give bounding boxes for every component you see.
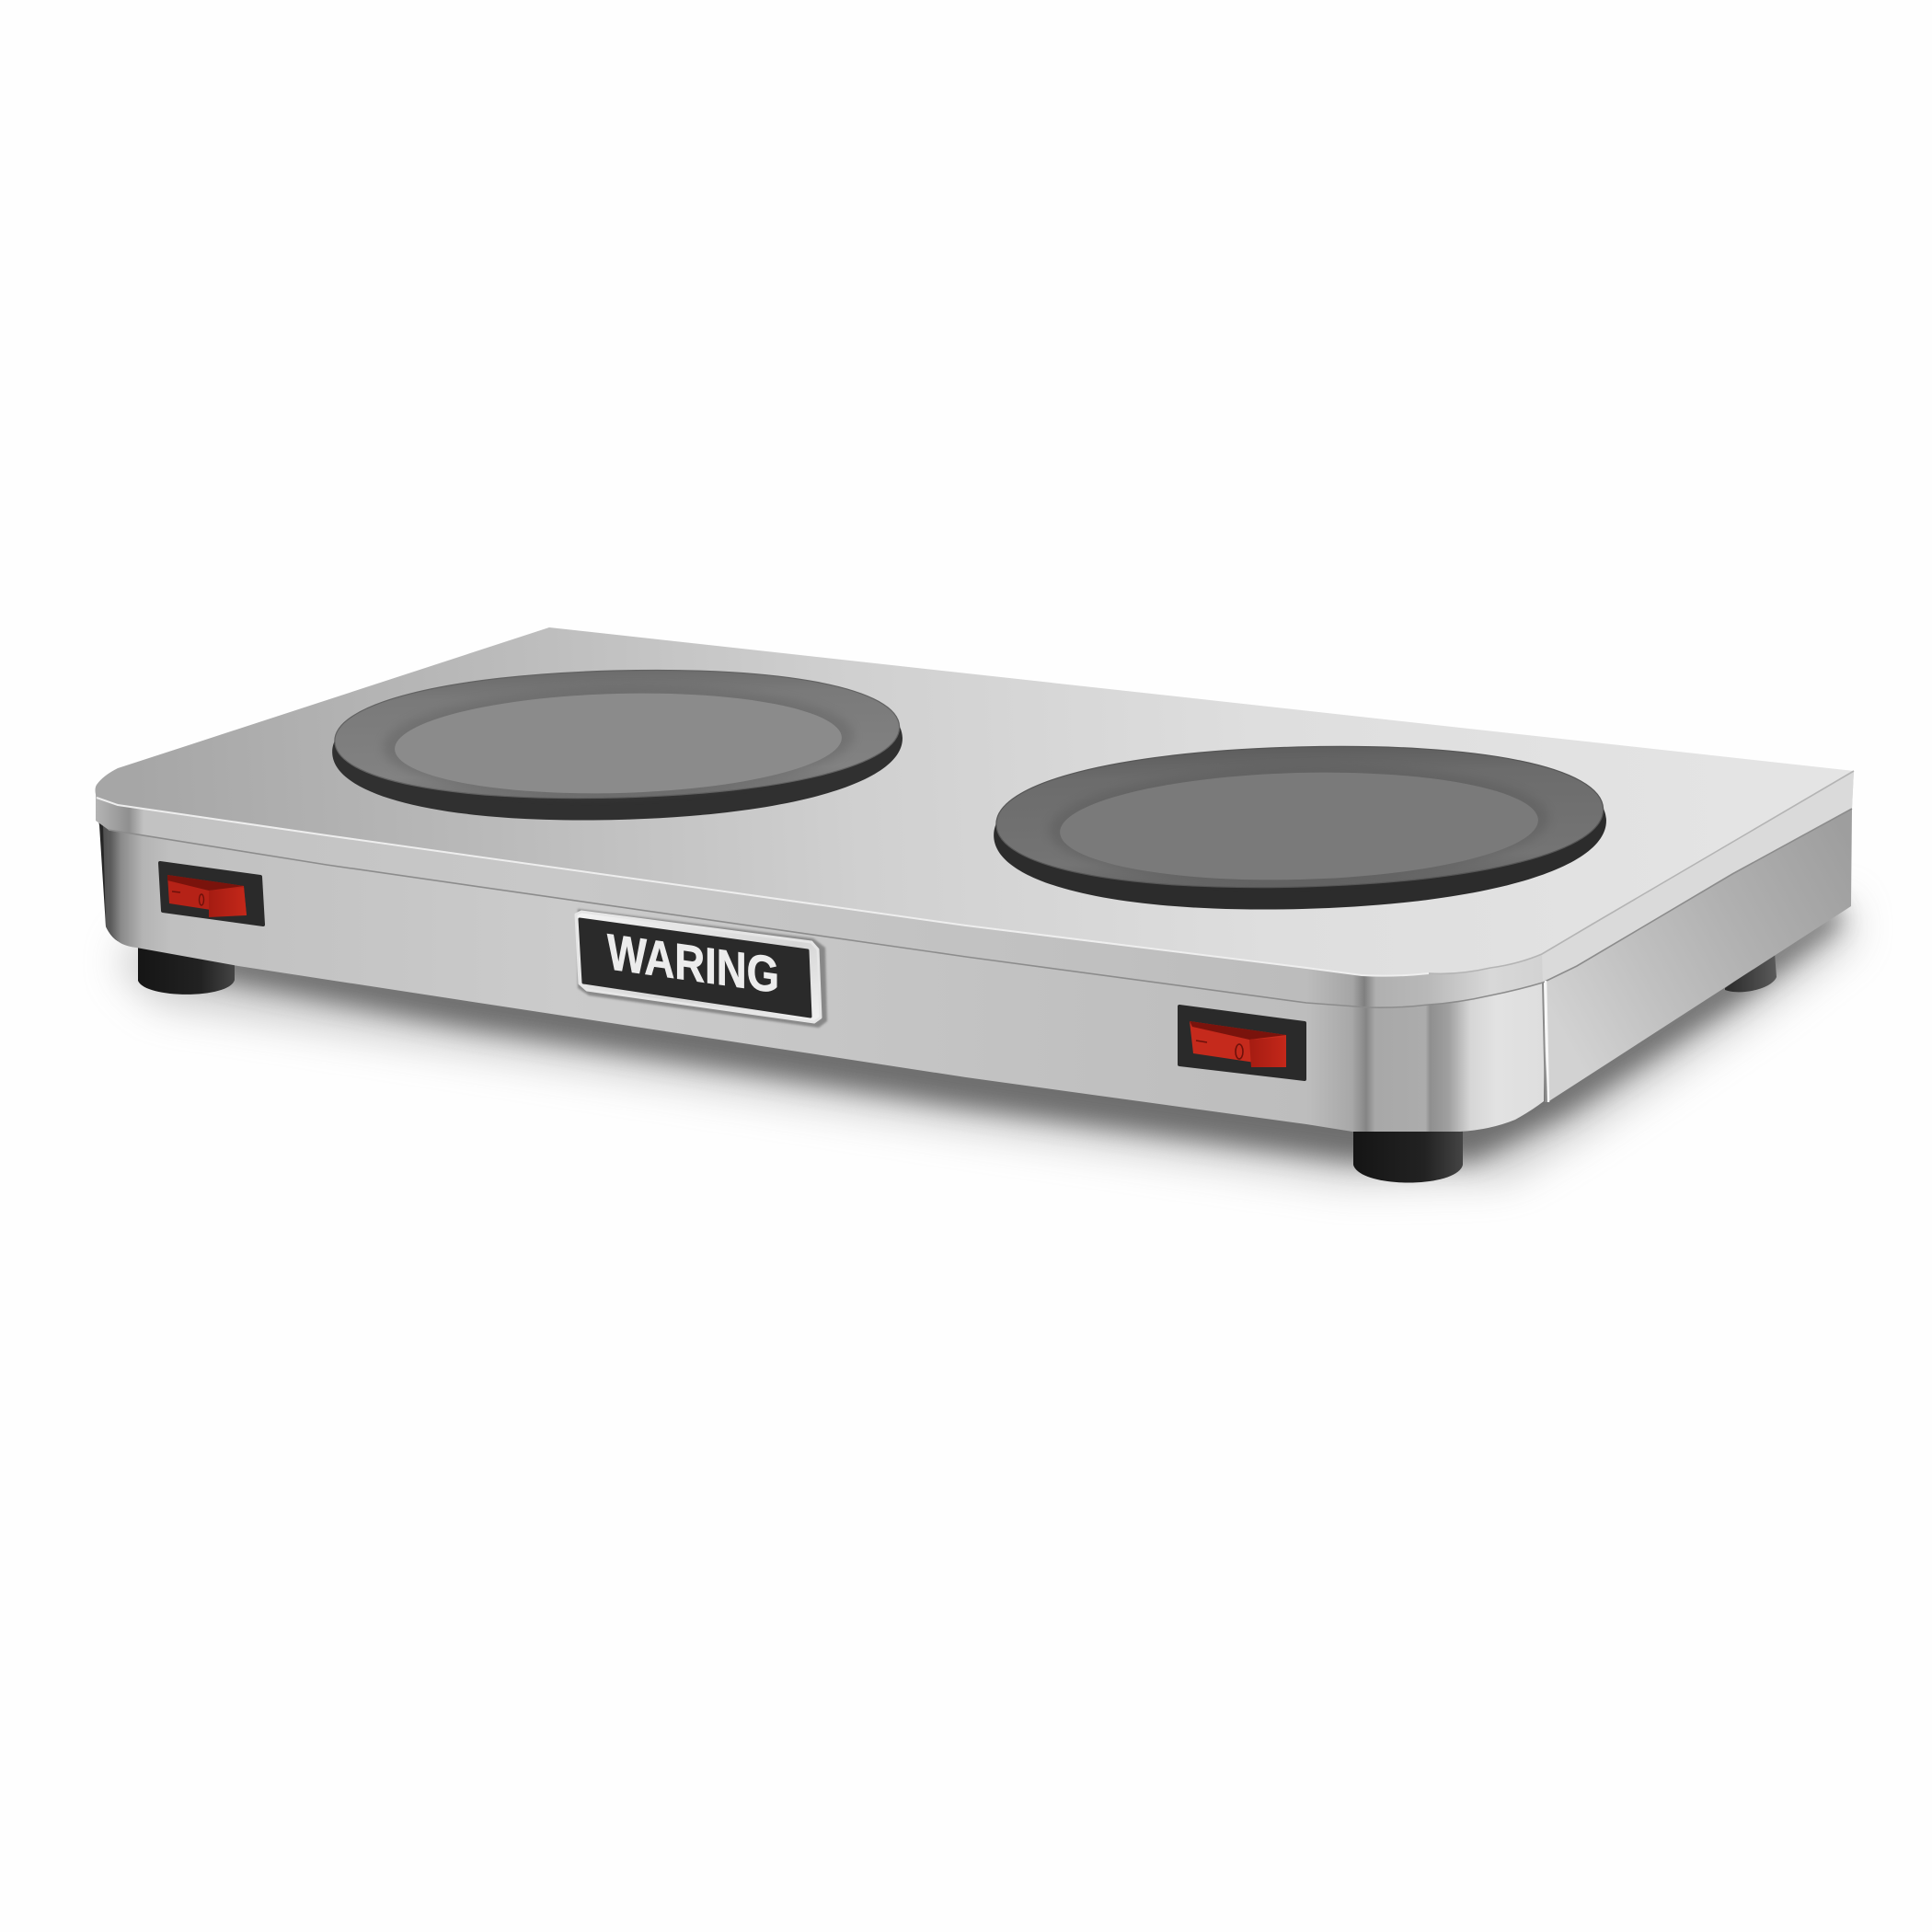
left foot: [138, 938, 235, 995]
rear left dark edge: [98, 817, 147, 949]
back foot: [1725, 953, 1777, 992]
right burner plate: [1059, 766, 1539, 886]
right burner: [992, 739, 1608, 917]
right side panel: [1546, 809, 1852, 1102]
left burner plate: [394, 688, 843, 799]
front panel with rounded corner post: [103, 823, 1544, 1132]
right burner rim: [995, 739, 1605, 895]
right foot: [1353, 1122, 1463, 1183]
right burner outer dark ring: [992, 739, 1608, 917]
top plate surface: [96, 627, 1854, 976]
right rim light strip: [1542, 771, 1854, 983]
seam at corner: [1543, 981, 1548, 1102]
left rocker switch: [160, 863, 263, 925]
ground shadow: [120, 897, 1854, 1182]
left burner outer dark ring: [330, 663, 904, 827]
left burner: [330, 663, 904, 827]
top plate rim: [96, 771, 1854, 1007]
right rocker switch: [1179, 1006, 1305, 1079]
rim right crease line: [1429, 771, 1854, 973]
rim lower shadow line: [109, 809, 1852, 1007]
rim highlight line: [97, 798, 1429, 976]
left burner rim: [333, 663, 901, 805]
right burner shading: [1047, 760, 1551, 889]
logo badge: [576, 909, 827, 1028]
left burner shading: [381, 681, 855, 802]
brand name: WARING: [607, 923, 779, 1004]
